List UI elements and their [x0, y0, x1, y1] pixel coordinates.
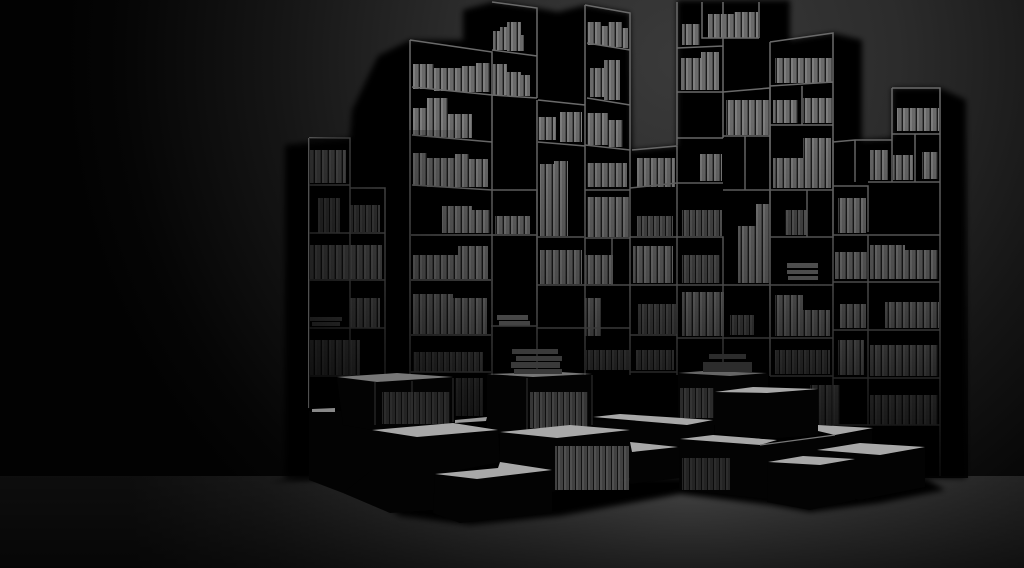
- shelf frame lines: [309, 2, 940, 476]
- plinth: centre back: [487, 372, 592, 434]
- floor bottom shading: [0, 470, 1024, 568]
- stack: centre: [511, 349, 562, 374]
- plinth: left chunk: [309, 408, 372, 493]
- plinth: left wide: [343, 423, 500, 513]
- plinth: right wide: [679, 425, 873, 499]
- stack: shelf right: [787, 263, 818, 280]
- plinth highlight between: [455, 417, 487, 423]
- plinth: centre front low: [433, 462, 552, 523]
- plinth: far right: [817, 443, 925, 500]
- lower shelves shading: [309, 156, 968, 478]
- stack: upper small: [497, 315, 530, 326]
- plinth: back left: [337, 373, 453, 430]
- plinth: centre low: [593, 414, 714, 446]
- plinth: small centre: [630, 442, 680, 484]
- plinth: right front: [767, 456, 855, 510]
- stack: left tower: [310, 317, 342, 326]
- floor: [0, 476, 1024, 568]
- plinth: centre front: [500, 425, 630, 492]
- foreground plinths: [309, 349, 925, 523]
- plinth: right top cube: [715, 387, 818, 439]
- books on shelves: [310, 12, 939, 425]
- stack: right: [703, 354, 752, 372]
- left tower shading: [309, 130, 457, 408]
- shelving silhouette: [285, 0, 966, 478]
- plinth: back right: [678, 371, 768, 425]
- floor shadows: [270, 476, 945, 525]
